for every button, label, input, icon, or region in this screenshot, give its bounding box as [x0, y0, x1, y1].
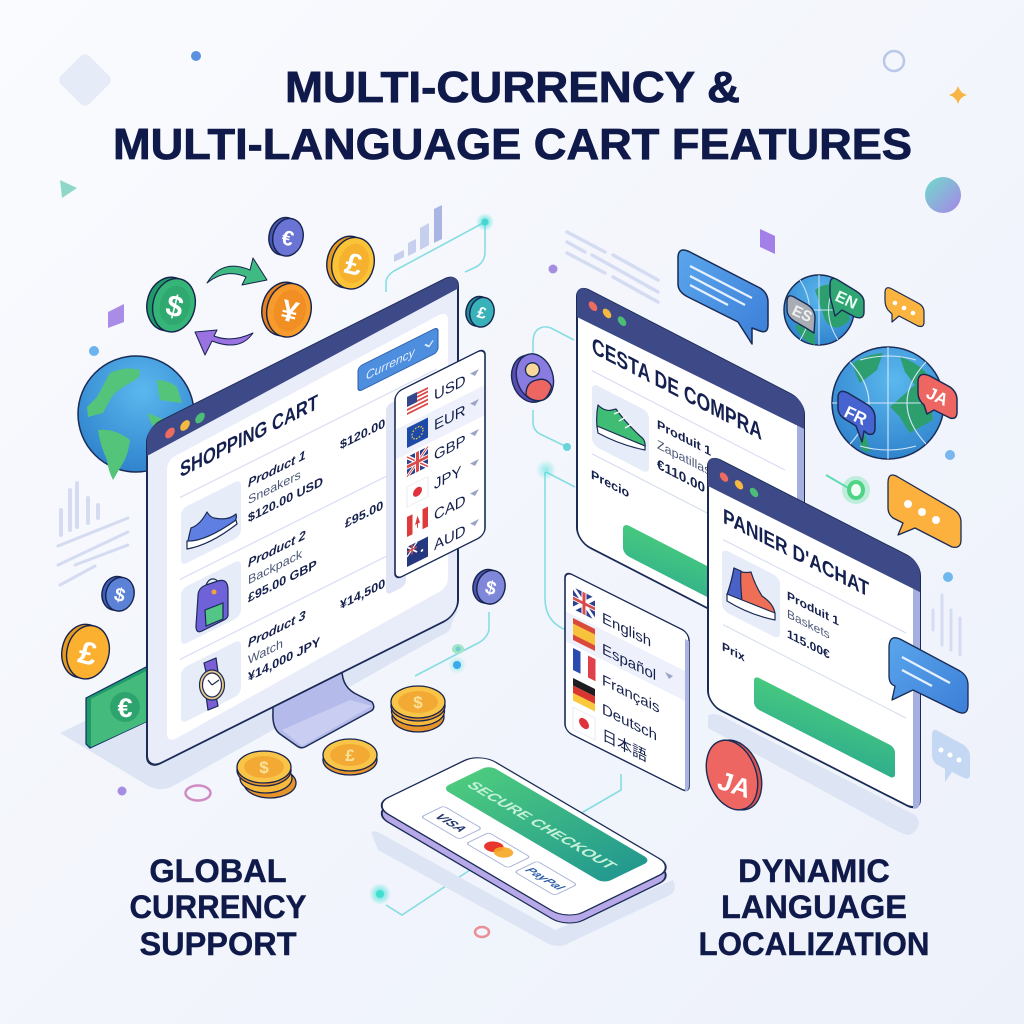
currency button — [358, 327, 438, 392]
coin: euro: € — [279, 226, 296, 251]
flag: Australia — [407, 536, 428, 567]
card: paypal — [515, 861, 577, 895]
coin: euro — [265, 214, 307, 259]
coin: yen: ¥ — [277, 294, 302, 330]
icon: backpack — [196, 579, 228, 632]
coin: blue dollar: $ — [112, 584, 128, 607]
coin: blue dollar — [98, 573, 138, 614]
speech bubble: small yellow — [885, 288, 924, 326]
coin: pound — [321, 232, 380, 294]
flag: Japan — [407, 476, 428, 507]
coin: pound: £ — [345, 746, 355, 765]
decorative shapes — [57, 51, 967, 937]
icon: red hi-top shoe — [727, 568, 775, 620]
cart rows text: $120.00 — [340, 416, 385, 452]
flag: Japan — [573, 707, 595, 740]
icon: green sneaker — [597, 405, 645, 450]
coin: orange pound: £ — [75, 634, 101, 673]
large globe with language tags — [832, 347, 957, 459]
speech bubble: blue large — [678, 250, 768, 344]
currency coins — [56, 214, 509, 684]
heading: shopping cart: SHOPPING CART — [180, 389, 318, 482]
heading: panier d'achat: PANIER D'ACHAT — [723, 504, 869, 602]
tag: FR: FR — [841, 402, 870, 429]
cart rows text: $120.00 USD — [248, 473, 323, 525]
coin: purple dollar: $ — [483, 577, 499, 600]
language names: 日本語 — [602, 726, 647, 766]
caption: dynamic language localization: LOCALIZATION — [698, 926, 930, 962]
tag: ES: ES — [789, 302, 815, 326]
cart rows text: Backpack — [248, 546, 303, 587]
button — [754, 675, 895, 779]
caption: dynamic language localization: DYNAMIC — [738, 853, 890, 889]
currency codes: GBP — [434, 432, 466, 464]
cart rows text: Product 1 — [248, 447, 306, 490]
currency codes: CAD — [434, 492, 466, 524]
cart rows text: Product 2 — [248, 527, 306, 570]
panel: secure checkout card — [373, 753, 675, 928]
caption: dynamic language localization — [698, 853, 930, 962]
card: visa: VISA — [431, 812, 471, 834]
panel: Spanish cart window — [577, 284, 804, 658]
caption: global currency support: CURRENCY — [130, 889, 307, 925]
product text — [722, 555, 839, 713]
coin stack: dollar — [391, 686, 445, 732]
speech bubble: blue small — [889, 638, 968, 713]
cart rows text: Sneakers — [248, 467, 301, 507]
product text: Produit 1 — [657, 417, 712, 459]
flag: USA — [407, 386, 428, 417]
language names: Français — [602, 672, 659, 717]
exchange arrows — [195, 258, 267, 355]
currency codes: AUD — [434, 522, 466, 554]
product text: Prix — [722, 639, 745, 665]
cart rows text: ¥14,500 — [340, 576, 385, 612]
caption: global currency support: SUPPORT — [139, 926, 297, 962]
product text: Zapatillas — [657, 437, 711, 479]
green banknote — [86, 665, 150, 748]
flag: UK — [407, 446, 428, 477]
product text: €110.00 — [657, 457, 705, 497]
cart rows text: ¥14,000 JPY — [248, 634, 320, 684]
language names — [602, 610, 659, 772]
coin: pound — [323, 739, 377, 775]
tag: JA: JA — [923, 383, 951, 410]
flag: EU — [407, 418, 428, 448]
title: MULTI-CURRENCY & — [285, 63, 740, 112]
panel: shopping cart monitor — [147, 272, 458, 770]
cart rows text — [248, 408, 385, 684]
checkout button: SECURE CHECKOUT — [462, 780, 620, 872]
card: visa — [421, 806, 482, 839]
product text: Baskets — [787, 606, 830, 642]
language names: English — [602, 610, 651, 651]
title: MULTI-LANGUAGE CART FEATURES — [113, 120, 912, 169]
cart rows text: Watch — [248, 636, 283, 667]
caption: global currency support: GLOBAL — [149, 853, 287, 889]
left globe — [78, 356, 194, 480]
flag: Germany — [573, 678, 595, 712]
product text: Precio — [591, 467, 629, 501]
coin: purple dollar — [469, 566, 509, 607]
floor shadows — [60, 610, 919, 946]
coin: orange pound — [56, 620, 115, 684]
checkout button — [442, 765, 651, 884]
heading: cesta de compra: CESTA DE COMPRA — [592, 333, 762, 446]
coin: teal pound — [463, 294, 497, 330]
glowing nodes — [369, 213, 571, 905]
button — [623, 523, 783, 636]
currency button: Currency — [366, 344, 415, 383]
coin stack: dollar: $ — [413, 693, 423, 712]
cart rows text: £95.00 GBP — [248, 557, 317, 605]
panel: currency dropdown — [386, 348, 485, 596]
coin stack: dollar: $ — [259, 758, 269, 777]
coin: dollar — [141, 273, 201, 337]
badge: JA coin: JA — [714, 765, 755, 804]
card: paypal: PayPal — [522, 866, 569, 892]
tag: EN: EN — [832, 288, 860, 313]
currency codes: EUR — [434, 402, 466, 434]
cart rows text: Product 3 — [248, 607, 306, 650]
flag: Spain — [573, 618, 595, 651]
green banknote: € — [117, 693, 133, 723]
coin: pound: £ — [341, 247, 366, 283]
coin: yen — [256, 278, 317, 342]
product text — [591, 383, 712, 543]
badge: JA coin — [697, 733, 771, 817]
flag: France — [573, 648, 596, 681]
flag: UK — [573, 587, 595, 620]
language names: Deutsch — [602, 701, 657, 745]
panel: language dropdown — [565, 571, 689, 793]
coin stack: dollar — [237, 751, 296, 798]
monitor stand — [273, 670, 374, 748]
currency codes: USD — [434, 372, 466, 404]
cart rows text: £95.00 — [345, 498, 383, 531]
coin: dollar: $ — [162, 289, 187, 325]
speech bubble: large yellow — [888, 475, 961, 547]
speech bubble: faded — [932, 730, 970, 782]
language names: Español — [602, 641, 656, 684]
small globe with language tags — [784, 275, 864, 345]
stacked gold coins — [237, 686, 445, 798]
flag: Canada — [407, 506, 428, 537]
currency codes — [434, 372, 466, 554]
coin: teal pound: £ — [475, 304, 488, 323]
caption: global currency support — [130, 853, 307, 962]
product text: Produit 1 — [787, 588, 839, 629]
connector lines — [386, 222, 621, 915]
icon: user avatar — [506, 349, 559, 407]
icon: blue sneaker — [187, 512, 237, 549]
icon: watch — [200, 658, 224, 710]
product text: 115.00€ — [787, 626, 830, 662]
card: mastercard — [466, 832, 530, 868]
panel: French cart window — [708, 454, 920, 812]
glowing pin — [826, 475, 870, 504]
caption: dynamic language localization: LANGUAGE — [721, 889, 907, 925]
currency codes: JPY — [434, 463, 462, 493]
title — [113, 63, 912, 169]
